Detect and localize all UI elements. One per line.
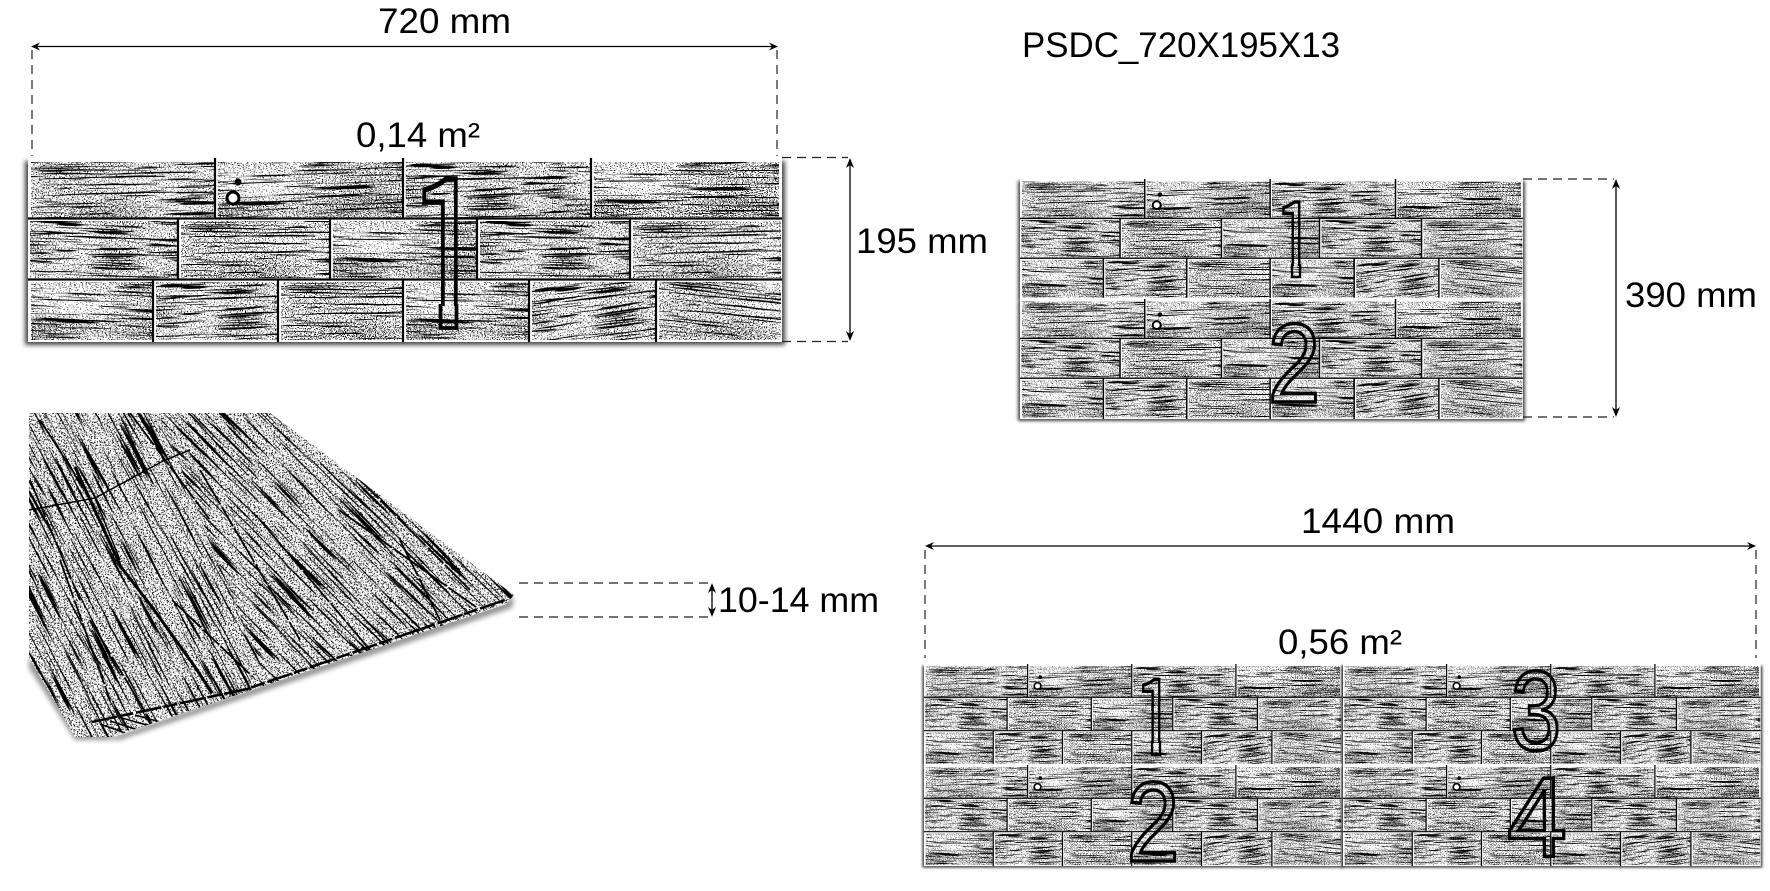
tile 1 texture bbox=[1010, 173, 1537, 314]
number 4: 4 bbox=[1507, 754, 1567, 881]
width label: 720 mm bbox=[378, 2, 511, 41]
tile 2 texture bbox=[916, 760, 1353, 879]
panel: perspective thickness view bbox=[26, 413, 877, 743]
area label: 0,14 m² bbox=[356, 116, 480, 155]
number 2: 2 bbox=[1268, 300, 1320, 426]
tile 4 texture bbox=[1335, 760, 1770, 879]
title: product code: PSDC_720X195X13 bbox=[1022, 26, 1340, 65]
width label: 1440 mm bbox=[1301, 502, 1455, 541]
number 1 bbox=[1282, 200, 1302, 278]
height dimension arrow bbox=[1523, 179, 1620, 417]
panel: four tiles bbox=[916, 502, 1770, 886]
number 3: 3 bbox=[1511, 647, 1561, 774]
height label: 390 mm bbox=[1625, 276, 1757, 315]
height label: 195 mm bbox=[856, 222, 988, 261]
number 1 bbox=[1142, 678, 1162, 756]
area label: 0,56 m² bbox=[1278, 623, 1402, 662]
width dimension arrow bbox=[31, 42, 778, 158]
number 1: 1 bbox=[1134, 633, 1175, 787]
tile 3 texture bbox=[1335, 659, 1770, 778]
panel: single tile 720 x 195 bbox=[22, 8, 986, 348]
tile 2 texture bbox=[1010, 293, 1537, 434]
height dimension arrow bbox=[782, 158, 854, 342]
width dimension arrow bbox=[925, 542, 1756, 658]
tile number 1 bbox=[422, 176, 458, 330]
tile number 1: 1 bbox=[407, 87, 486, 389]
shadow bbox=[29, 597, 514, 740]
tile 1 texture bbox=[916, 659, 1353, 778]
panel: two tiles stacked bbox=[1015, 178, 1755, 424]
number 1: 1 bbox=[1275, 155, 1314, 307]
number 2: 2 bbox=[1127, 760, 1179, 886]
thickness label: 10-14 mm bbox=[718, 581, 879, 620]
thickness dashes and arrow bbox=[519, 583, 716, 617]
tile texture bbox=[14, 148, 802, 365]
plank surface bbox=[29, 413, 514, 737]
